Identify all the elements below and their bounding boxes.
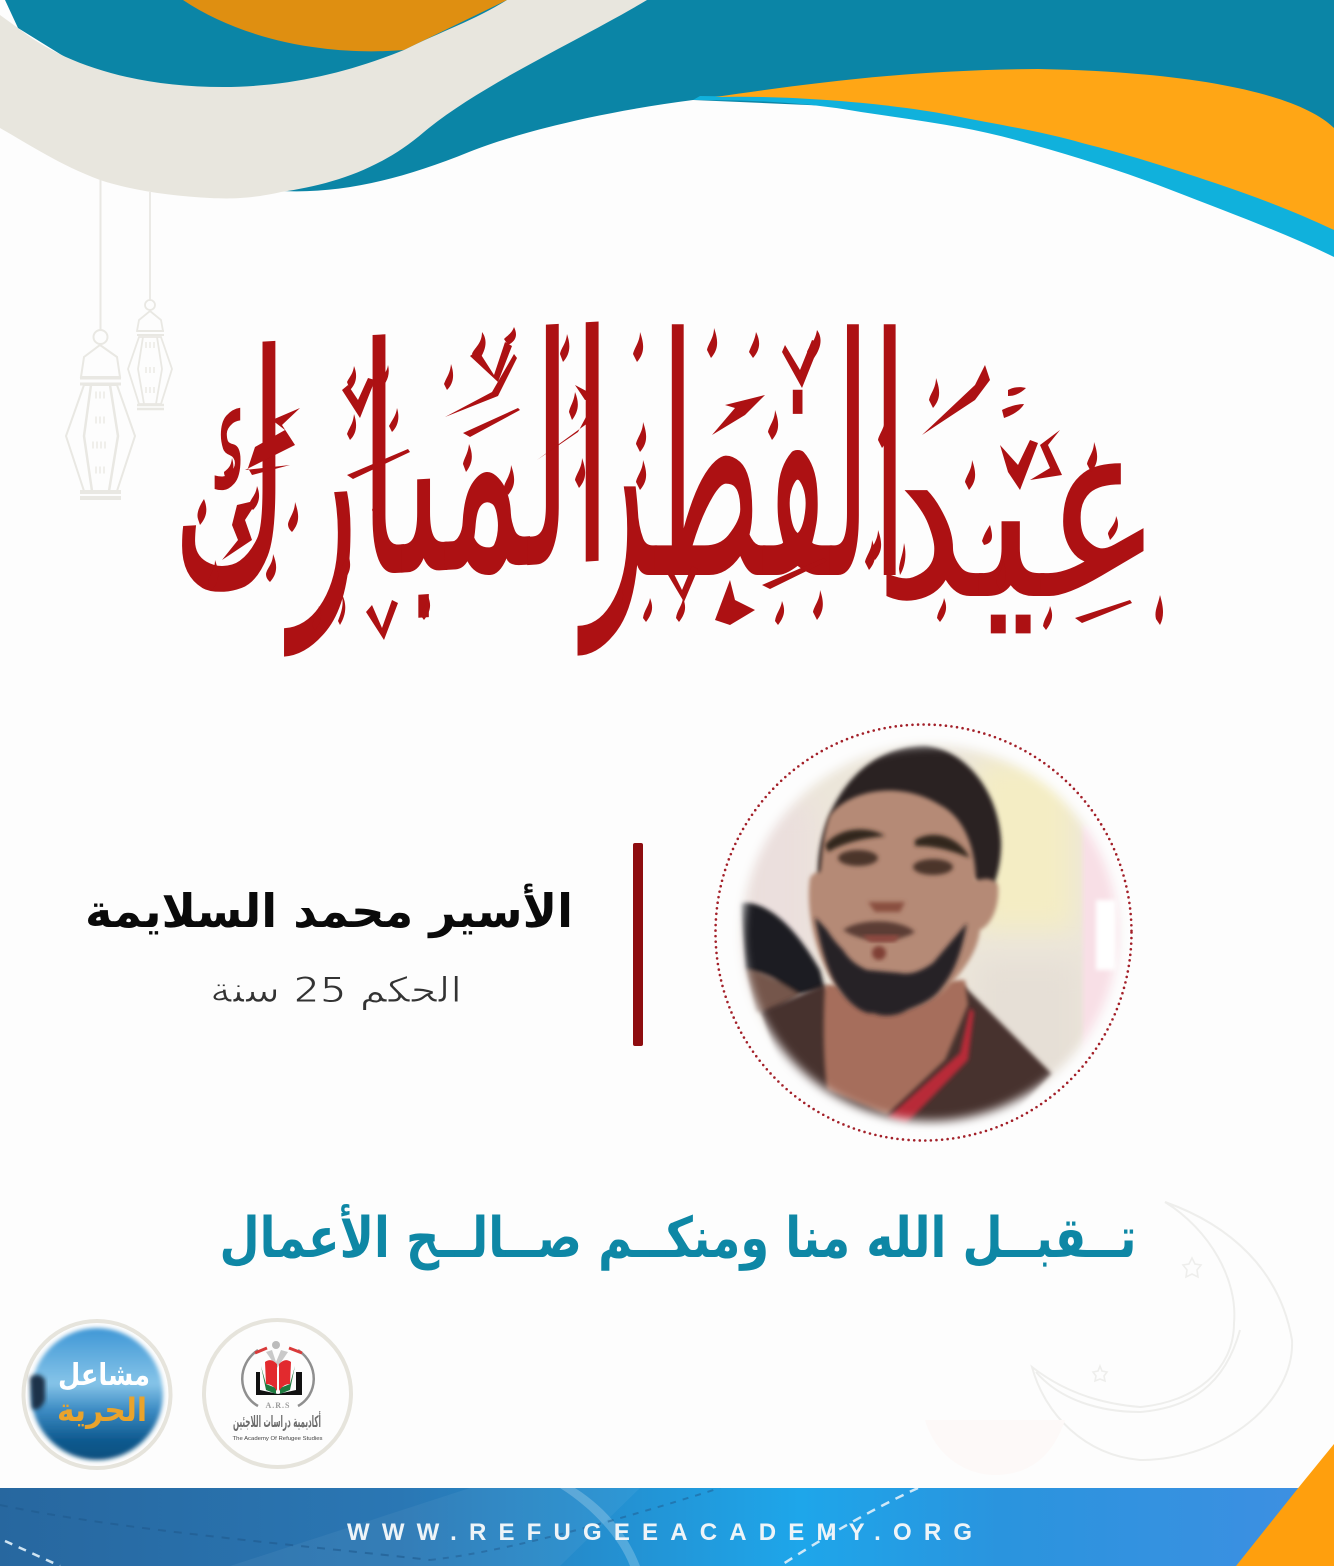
footer band (0, 1444, 1334, 1566)
calligraphy ornaments: v marks (342, 340, 1038, 640)
hair (818, 745, 1001, 895)
lantern: small (128, 192, 172, 409)
logo: Mashael al-Hurriya: الحرية (57, 1391, 147, 1429)
profile divider bar (633, 843, 643, 1046)
heading calligraphy: Eid al-Fitr (172, 269, 1164, 663)
corner triangle (1236, 1444, 1334, 1566)
portrait dotted ring (716, 724, 1132, 1140)
portrait (716, 724, 1132, 1140)
word: Eid: عيد (874, 361, 1164, 657)
prisoner name: الأسير محمد السلايمة (85, 883, 573, 938)
logo English name: The Academy Of Refugee Studies (232, 1436, 323, 1442)
greeting: تــقبــل الله منا ومنكــم صــالــح الأعمال (220, 1203, 1136, 1271)
calligraphy ornaments: slanted bars (347, 354, 1132, 623)
calligraphy ornaments: hamza shapes (222, 395, 1062, 625)
logo: Academy of Refugee Studies (204, 1320, 351, 1467)
website url: WWW.REFUGEEACADEMY.ORG (347, 1519, 972, 1546)
logo arcs (242, 1350, 314, 1406)
word: al-Mubarak: المبارك (172, 269, 612, 663)
lanterns (66, 180, 172, 498)
word: al-Fitr: الفطر (577, 270, 908, 658)
top wave: teal (5, 0, 1334, 191)
neck (824, 980, 968, 1115)
portrait photo (730, 735, 1130, 1135)
sentence text: الحكم 25 سنة (210, 971, 462, 1011)
top wave: orange right (715, 69, 1334, 230)
eyes and brows (825, 829, 970, 912)
logo: Mashael al-Hurriya: مشاعل (58, 1358, 150, 1393)
top wave: dark orange (183, 0, 507, 51)
logo book (256, 1372, 302, 1395)
faint crescent and stars (925, 1202, 1292, 1475)
logo: Academy of Refugee Studies: أكاديمية دراسات اللاجئين (233, 1411, 321, 1431)
lantern: large (66, 180, 135, 498)
face (809, 791, 998, 1012)
beard (815, 917, 967, 1016)
top wave: cyan ribbon (693, 96, 1334, 257)
top wave: cream (0, 0, 647, 198)
moustache and mouth (843, 921, 915, 940)
calligraphy ornaments (197, 327, 1163, 630)
background figure (740, 903, 825, 1015)
logo: Mashael al-Hurriya (24, 1321, 170, 1468)
jacket (760, 985, 1052, 1130)
logo initials: A.R.S (265, 1401, 291, 1410)
